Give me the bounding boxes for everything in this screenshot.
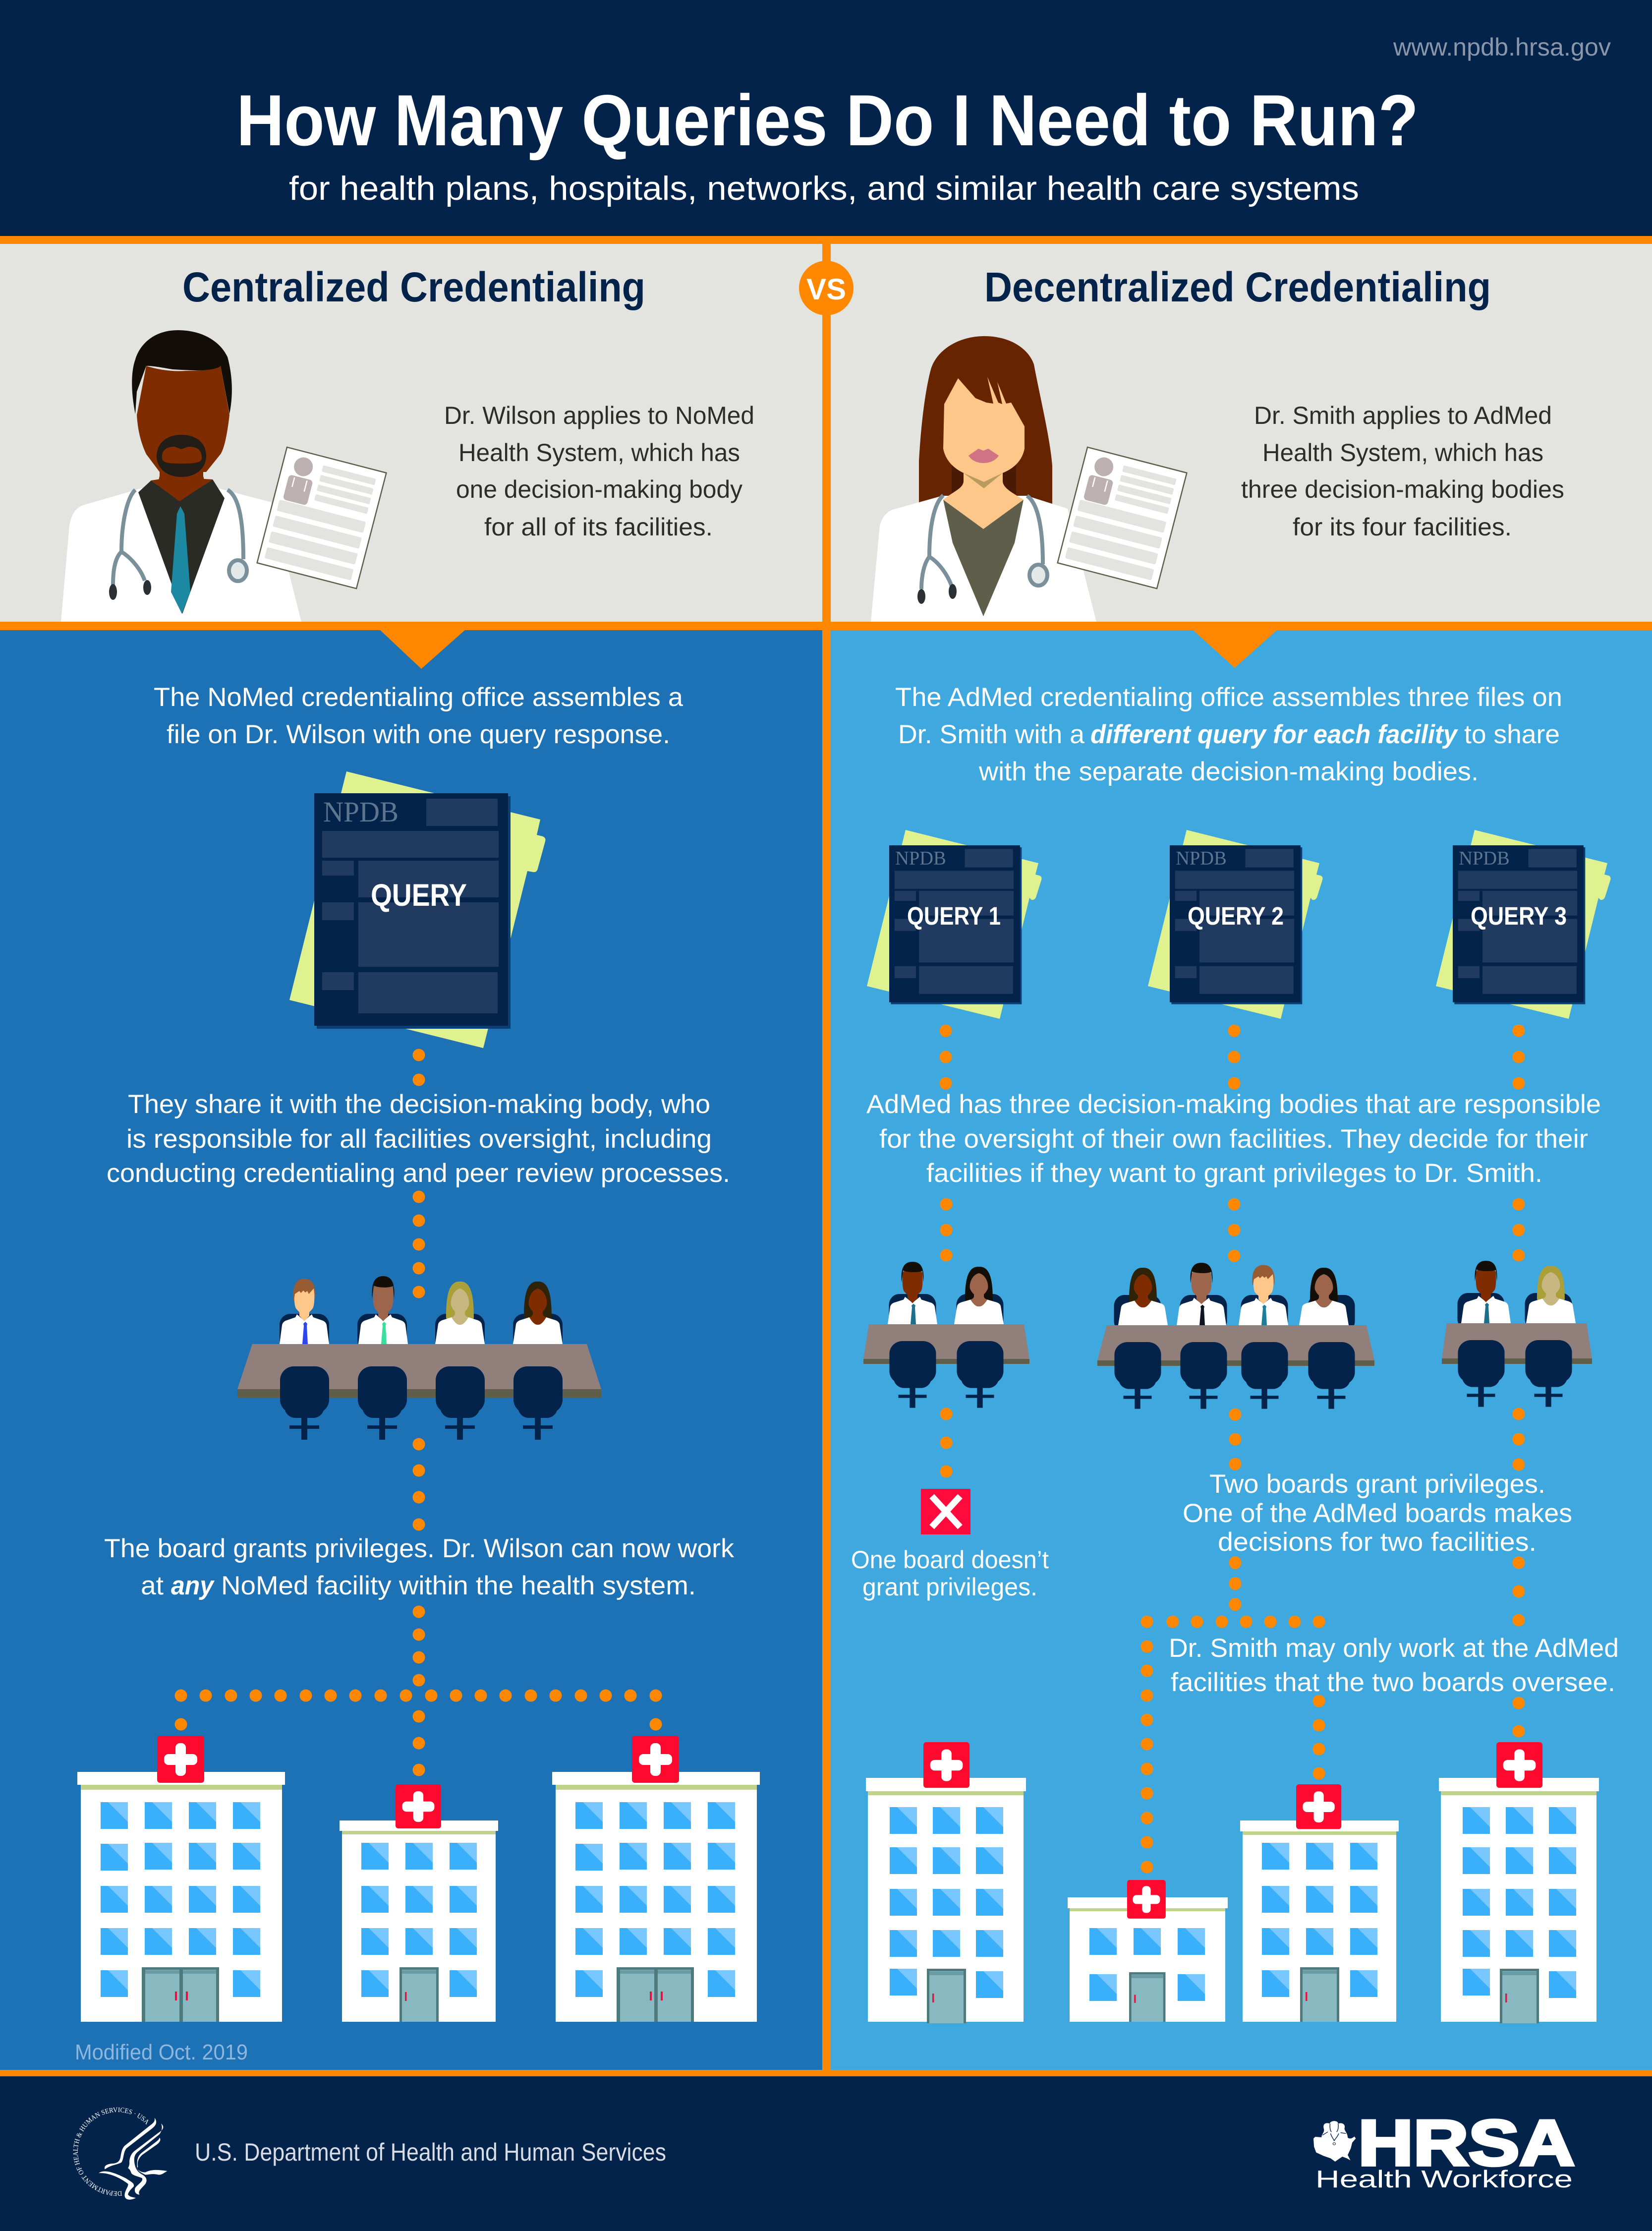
text: AdMed office assembles files (895, 683, 1562, 786)
icon: hospital right 3 (1240, 1784, 1399, 2022)
connector: boards to facilities, right (1141, 1556, 1525, 1873)
text: one board denies (851, 1546, 1049, 1601)
icon: hospital left 1 (77, 1736, 285, 2022)
icon: HHS seal: DEPARTMENT OF HEALTH & HUMAN SERVICES · USA (73, 2107, 149, 2196)
icon: board 3, two members (1442, 1261, 1592, 1407)
icon: Dr. Wilson (61, 330, 386, 622)
text: two boards grant: Two boards grant privileges. (1209, 1469, 1545, 1499)
text: Health Workforce: Health Workforce (1315, 2166, 1573, 2193)
vs badge: VS (806, 273, 846, 306)
text: Dr. Smith scenario: for its four facilities. (1293, 513, 1512, 541)
text: board responsibility: They share it with the decision-making body, who (128, 1090, 710, 1119)
icon: query 3 document (1436, 830, 1611, 1019)
text: one board denies: grant privileges. (862, 1573, 1037, 1601)
arrow: right panel pointer (1193, 630, 1277, 668)
text: three boards responsibility: facilities if they want to grant privileges to Dr. Smith. (926, 1159, 1542, 1188)
text: Dr. Smith scenario: three decision-making bodies (1241, 475, 1564, 503)
text: Dr. Wilson scenario: Dr. Wilson applies to NoMed (444, 402, 754, 429)
website url: www.npdb.hrsa.gov (1393, 33, 1611, 61)
text: Dr. Smith scenario: Health System, which has (1262, 439, 1543, 467)
text: board grants privileges: The board grants privileges. Dr. Wilson can now work (104, 1534, 735, 1563)
icon: hospital right 1 (866, 1742, 1026, 2023)
icon: query document (289, 771, 545, 1048)
icon: lips (968, 449, 999, 463)
text: one board denies: One board doesn’t (851, 1546, 1049, 1574)
panel: decentralized background (831, 630, 1652, 2070)
text: Dr. Wilson scenario: for all of its facilities. (484, 513, 713, 541)
text: HRSA: HRSA (1358, 2107, 1575, 2179)
text: AdMed office assembles files: The AdMed credentialing office assembles three files on (895, 683, 1562, 712)
text: board grants privileges (104, 1534, 735, 1600)
icon: query 2 document: NPDB (1176, 847, 1227, 869)
icon: query 1 document (867, 830, 1042, 1019)
text: Dr. Smith scenario (1241, 402, 1564, 541)
text: two boards grant (1183, 1469, 1572, 1557)
text: two boards grant: decisions for two facilities. (1218, 1527, 1537, 1557)
icon: hospital left 3 (552, 1736, 760, 2022)
icon: hospital left 2 (340, 1784, 498, 2022)
panel: intro background (0, 244, 1652, 622)
text: board grants privileges: at (141, 1571, 164, 1600)
footer band (73, 2107, 1575, 2200)
arrow: left panel pointer (380, 630, 465, 669)
title: How Many Queries Do I Need to Run? (236, 80, 1419, 161)
text: three boards responsibility: for the oversight of their own facilities. They decide for their (879, 1124, 1588, 1154)
connector: query to board, left (412, 1049, 425, 1531)
icon: query 2 document (1148, 830, 1322, 1019)
text: board responsibility (107, 1090, 730, 1188)
text: three boards responsibility (866, 1090, 1601, 1188)
icon: hospital right 4 (1439, 1742, 1599, 2023)
text: board responsibility: is responsible for all facilities oversight, including (126, 1124, 712, 1154)
header band (0, 0, 1652, 236)
icon: query document: NPDB (323, 796, 399, 828)
icon: board 1, two members (863, 1262, 1029, 1408)
icon: query 3 document: QUERY 3 (1471, 902, 1567, 930)
icon: HRSA map and people (1313, 2121, 1356, 2162)
text: Dr. Wilson scenario: Health System, which has (458, 439, 740, 467)
icon: query 3 document: NPDB (1459, 847, 1510, 869)
text: Dr. Smith may only work: facilities that the two boards oversee. (1171, 1668, 1615, 1697)
connector: queries to boards, right (940, 1024, 1525, 1262)
text: HHS name: U.S. Department of Health and Human Services (195, 2138, 666, 2166)
heading: decentralized: Decentralized Credentialing (984, 264, 1491, 310)
footnote: modified date: Modified Oct. 2019 (75, 2040, 248, 2064)
subtitle: for health plans, hospitals, networks, and similar health care systems (289, 170, 1359, 207)
text: NoMed office assembles file (154, 683, 684, 749)
text: AdMed office assembles files: Dr. Smith with a (898, 720, 1085, 749)
connector: board to three facilities (174, 1605, 662, 1776)
text: board grants privileges: NoMed facility within the health system. (221, 1571, 696, 1600)
icon: Dr. Smith (871, 336, 1187, 622)
text: AdMed office assembles files: different query for each facility (1090, 720, 1458, 749)
icon: hospital right 2 small (1068, 1880, 1228, 2022)
text: Dr. Wilson scenario: one decision-making body (456, 475, 742, 503)
text: Dr. Smith may only work (1169, 1634, 1619, 1697)
panel: centralized background (0, 630, 822, 2070)
icon: board table, four members (237, 1276, 601, 1440)
icon: query 1 document: QUERY 1 (907, 902, 1001, 930)
icon: query 2 document: QUERY 2 (1188, 902, 1284, 930)
icon: query 1 document: NPDB (895, 847, 946, 869)
text: board responsibility: conducting credentialing and peer review processes. (107, 1159, 730, 1188)
text: board grants privileges: any (171, 1571, 215, 1600)
text: NoMed office assembles file: The NoMed credentialing office assembles a (154, 683, 684, 712)
icon: red X denial (921, 1489, 970, 1534)
text: two boards grant: One of the AdMed boards makes (1183, 1499, 1572, 1528)
text: AdMed office assembles files: with the separate decision-making bodies. (978, 757, 1479, 786)
icon: application form (1058, 447, 1187, 588)
vs badge (799, 261, 854, 315)
text: three boards responsibility: AdMed has three decision-making bodies that are responsible (866, 1090, 1601, 1119)
icon: query document: QUERY (371, 878, 467, 913)
connector: boards to outcomes (940, 1408, 1525, 1477)
text: Dr. Smith scenario: Dr. Smith applies to AdMed (1254, 402, 1552, 429)
icon: application form (257, 447, 386, 588)
text: Dr. Wilson scenario (444, 402, 754, 541)
text: NoMed office assembles file: file on Dr. Wilson with one query response. (167, 720, 670, 749)
icon: board 2, four members (1097, 1263, 1374, 1409)
text: AdMed office assembles files: to share (1464, 720, 1560, 749)
text: Dr. Smith may only work: Dr. Smith may only work at the AdMed (1169, 1634, 1619, 1663)
heading: centralized: Centralized Credentialing (182, 264, 645, 310)
